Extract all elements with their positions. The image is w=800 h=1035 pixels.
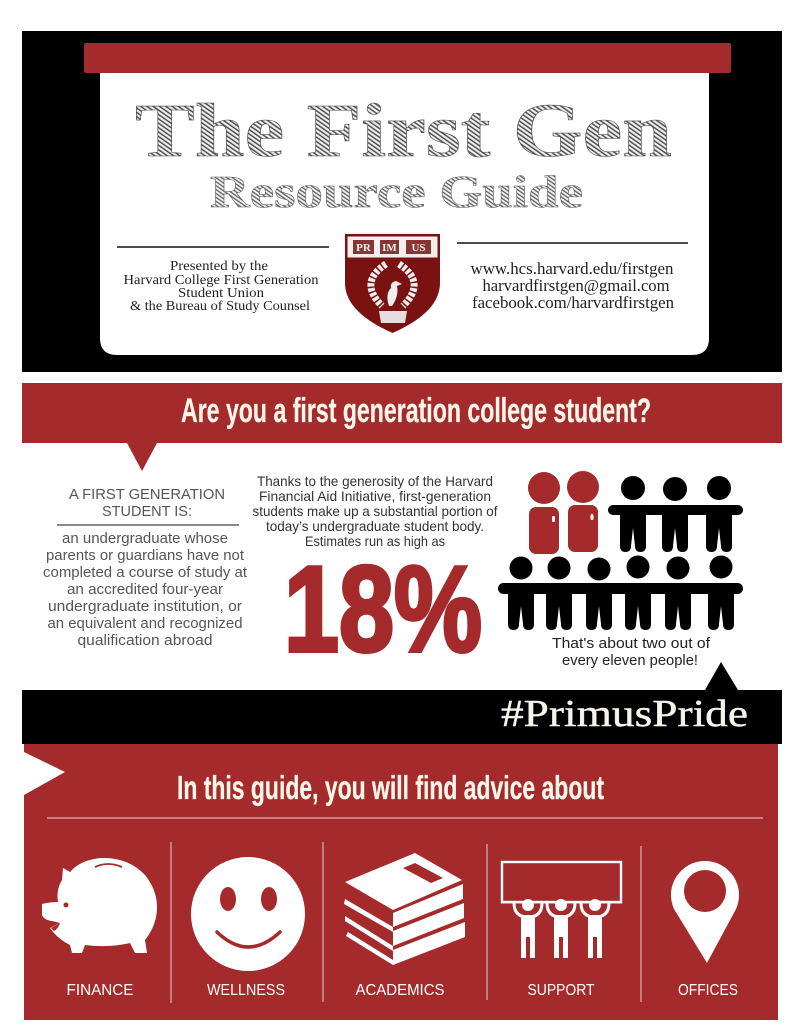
subtitle: Resource Guide bbox=[210, 167, 583, 217]
presenter text: Harvard College First Generation bbox=[124, 273, 318, 288]
icon: Primus shield bbox=[345, 234, 440, 333]
statistic intro text: Financial Aid Initiative, first-generation bbox=[259, 488, 491, 504]
label: finance: FINANCE bbox=[66, 982, 134, 999]
red top bar bbox=[84, 43, 731, 73]
panel: definition bbox=[43, 486, 248, 649]
definition text: an equivalent and recognized bbox=[48, 615, 242, 632]
hashtag: #PrimusPride bbox=[501, 693, 748, 735]
label: offices: OFFICES bbox=[678, 982, 738, 999]
definition text: undergraduate institution, or bbox=[48, 598, 242, 615]
panel: hashtag band bbox=[22, 662, 782, 744]
icon: Primus shield: IM bbox=[382, 242, 397, 254]
black people bottom row bbox=[498, 556, 743, 630]
definition heading: A FIRST GENERATION bbox=[69, 486, 225, 503]
title: The First Gen bbox=[135, 89, 672, 173]
panel: guide topics bbox=[24, 744, 778, 1020]
contact links: www.hcs.harvard.edu/firstgen bbox=[470, 259, 674, 278]
pictogram: two of eleven people bbox=[498, 471, 743, 669]
label: wellness: WELLNESS bbox=[207, 982, 285, 999]
pictogram caption: every eleven people! bbox=[562, 653, 698, 669]
definition text: parents or guardians have not bbox=[46, 547, 245, 564]
statistic intro text: today’s undergraduate student body. bbox=[266, 518, 484, 534]
statistic intro text: Estimates run as high as bbox=[305, 533, 445, 549]
icon: Primus shield: US bbox=[411, 242, 426, 254]
definition text: an undergraduate whose bbox=[62, 530, 228, 547]
definition text: qualification abroad bbox=[78, 632, 212, 649]
white card bbox=[100, 70, 709, 355]
icon: people holding sign bbox=[501, 862, 622, 958]
pictogram caption bbox=[552, 636, 711, 669]
definition heading: STUDENT IS: bbox=[102, 503, 192, 520]
pictogram caption: That's about two out of bbox=[552, 636, 711, 652]
label: academics: ACADEMICS bbox=[356, 982, 444, 999]
guide heading: In this guide, you will find advice about bbox=[177, 769, 604, 806]
label: support: SUPPORT bbox=[528, 982, 595, 999]
contact links: facebook.com/harvardfirstgen bbox=[472, 293, 674, 312]
presenter text bbox=[117, 247, 329, 314]
definition text: completed a course of study at bbox=[43, 564, 248, 581]
presenter text: & the Bureau of Study Counsel bbox=[130, 299, 310, 314]
statistic intro text: students make up a substantial portion of bbox=[252, 503, 498, 519]
panel: statistic bbox=[252, 473, 498, 677]
red people bbox=[528, 471, 599, 554]
statistic intro text: Thanks to the generosity of the Harvard bbox=[257, 473, 493, 489]
icon: Primus shield: PR bbox=[356, 242, 372, 254]
big number: 18% bbox=[284, 541, 482, 677]
contact links: harvardfirstgen@gmail.com bbox=[482, 276, 670, 295]
icon: piggy bank bbox=[42, 858, 157, 953]
definition text: an accredited four-year bbox=[67, 581, 223, 598]
presenter text: Student Union bbox=[178, 286, 264, 301]
panel: question banner bbox=[22, 383, 782, 471]
icon: books bbox=[344, 853, 465, 965]
definition text bbox=[43, 530, 248, 649]
definition heading bbox=[69, 486, 225, 520]
contact links bbox=[457, 243, 688, 312]
statistic intro text bbox=[252, 473, 498, 549]
panel: header bbox=[22, 31, 782, 372]
icon: map pin bbox=[671, 861, 739, 963]
icon: smiley face bbox=[191, 857, 305, 971]
presenter text: Presented by the bbox=[170, 259, 268, 274]
black people top row bbox=[608, 476, 743, 552]
